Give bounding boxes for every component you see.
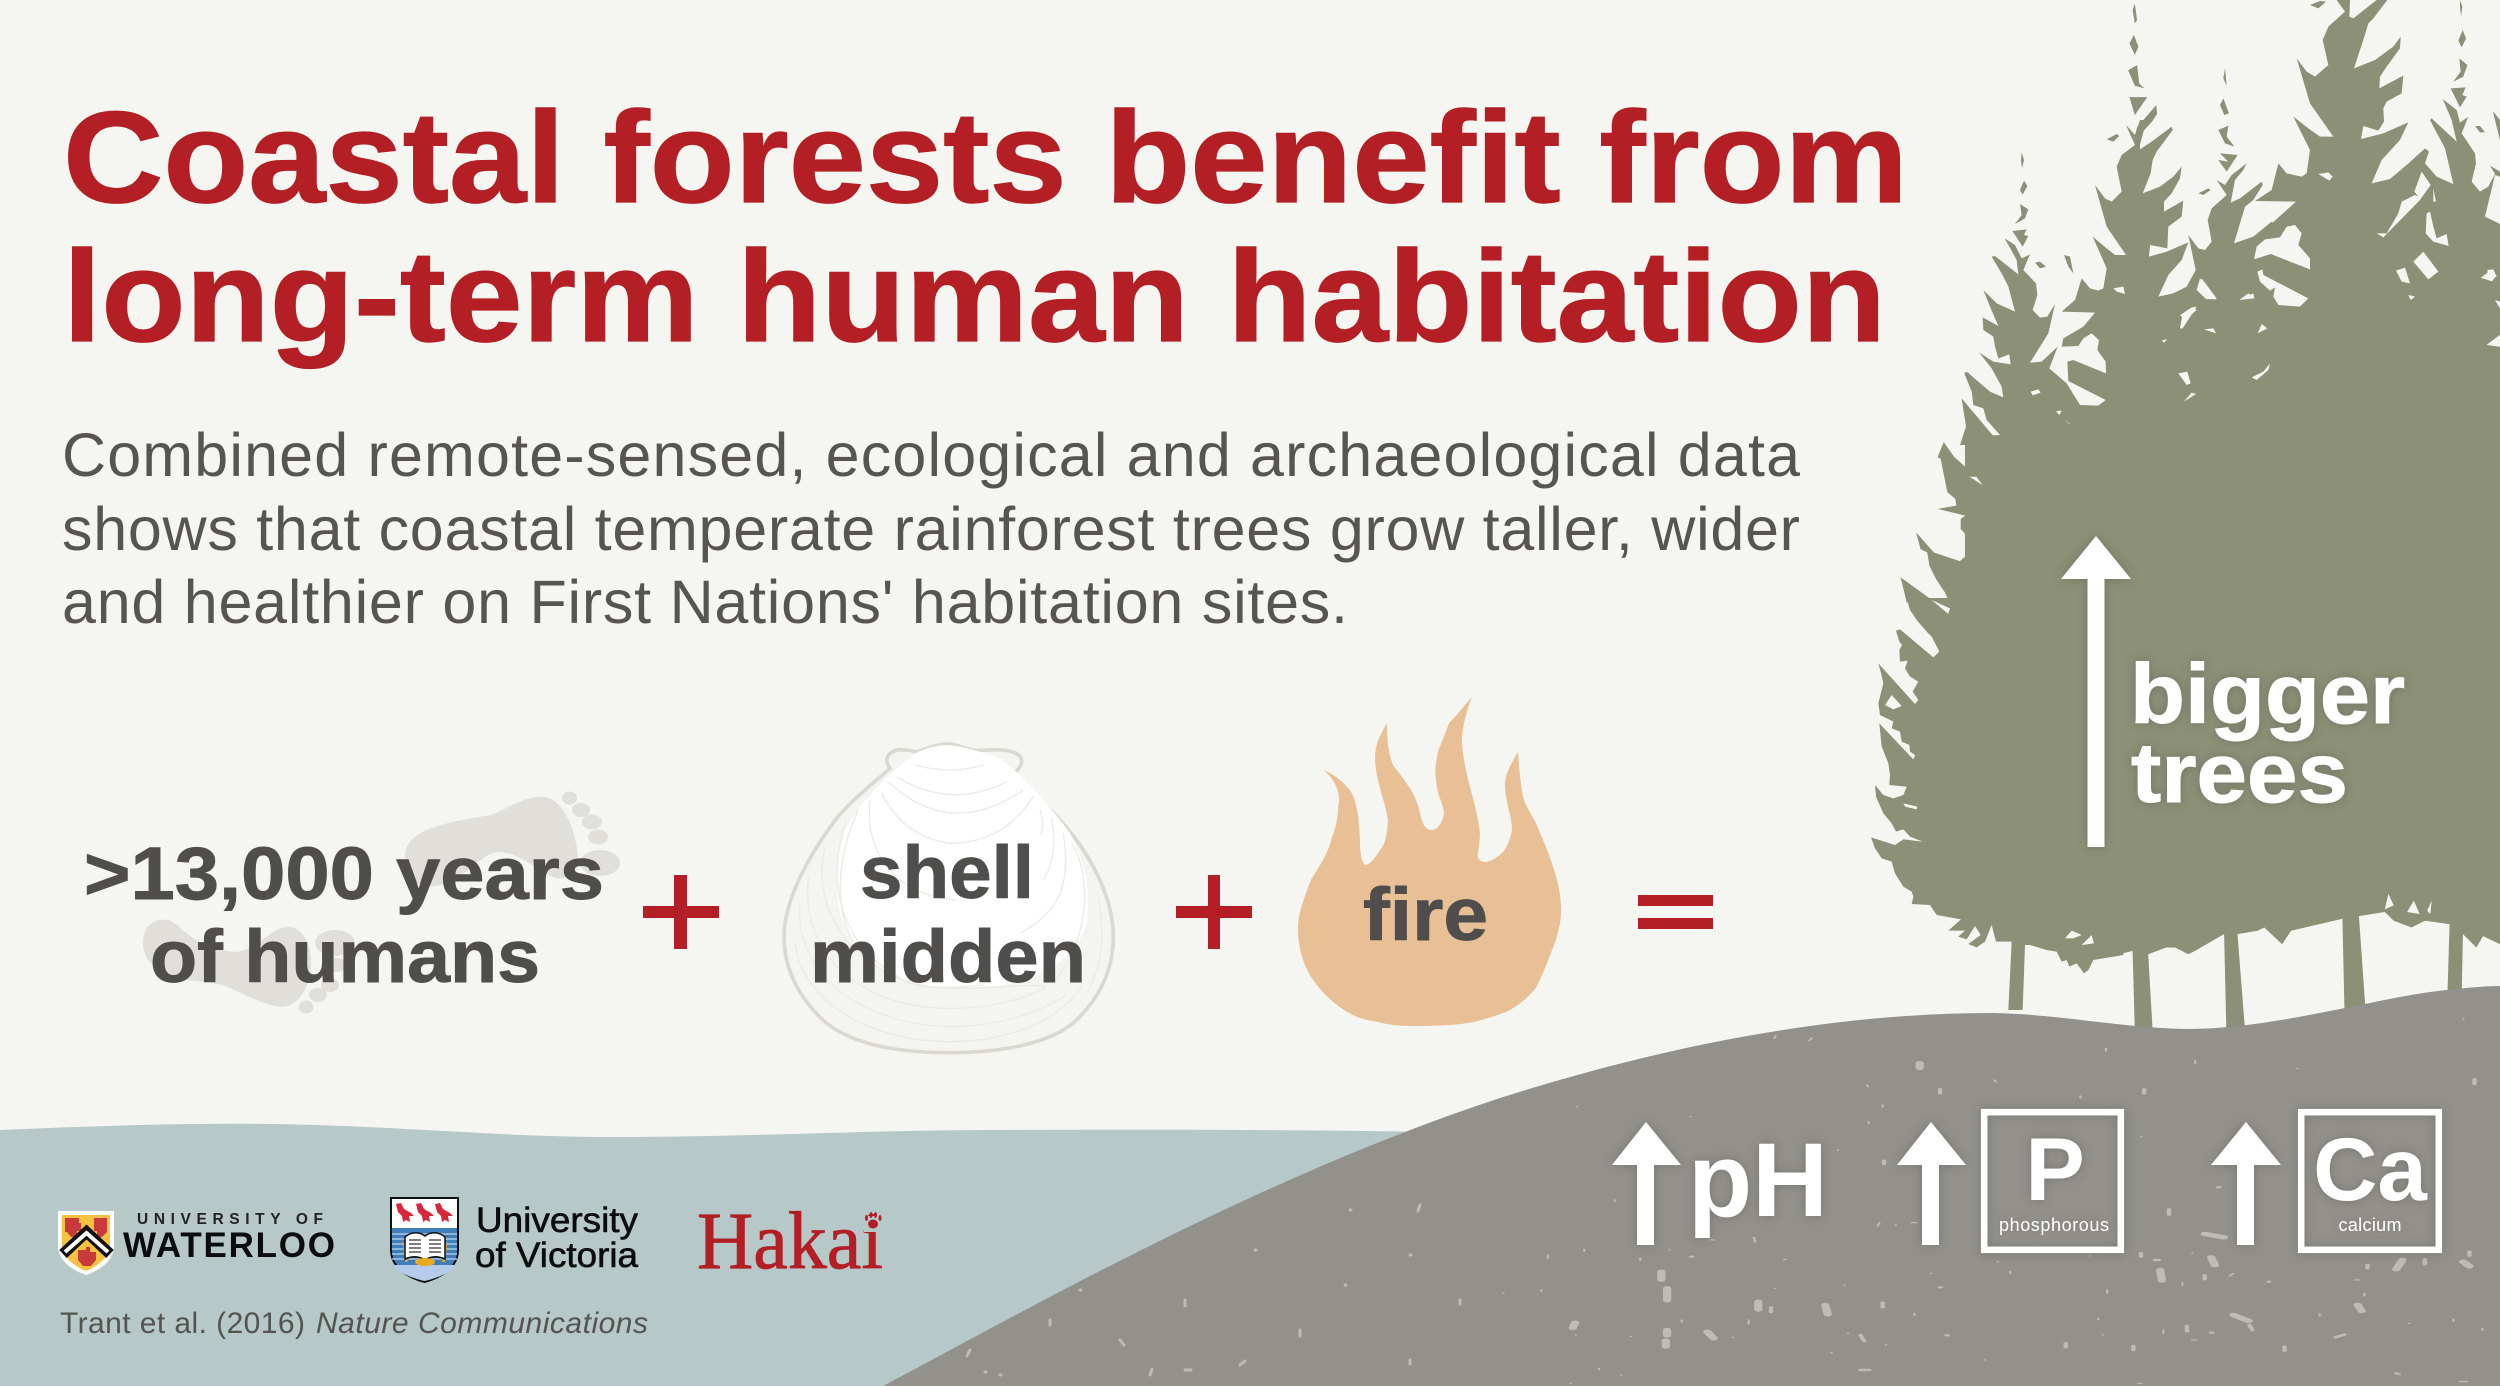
element box: phosphorous: P [2025, 1119, 2085, 1219]
element box: calcium: calcium [2338, 1215, 2402, 1235]
logo: University of Waterloo: UNIVERSITY OF [137, 1211, 323, 1228]
citation: Trant et al. (2016) [60, 1307, 305, 1340]
label: bigger trees: bigger [2130, 647, 2405, 741]
paw mark [864, 1212, 882, 1232]
element box: calcium [2301, 1112, 2439, 1250]
element box: calcium: Ca [2313, 1119, 2428, 1219]
water band [0, 1124, 1450, 1386]
plus sign [1176, 875, 1252, 949]
citation: Nature Communications [316, 1307, 648, 1340]
intro paragraph [62, 421, 1800, 636]
label: shell midden: shell [860, 831, 1034, 914]
element box: phosphorous [1984, 1112, 2121, 1250]
logo: University of Victoria: University [476, 1201, 639, 1240]
arrow: phosphorous up [1897, 1122, 1966, 1245]
waterloo shield [58, 1211, 114, 1275]
label: bigger trees: trees [2131, 726, 2348, 820]
ground speckles [967, 1019, 2482, 1383]
arrow: pH up [1612, 1122, 1681, 1245]
victoria shield [391, 1198, 458, 1282]
arrow: calcium up [2211, 1122, 2281, 1245]
tree canopy gaps [1885, 172, 2500, 945]
intro paragraph: and healthier on First Nations' habitation sites. [62, 568, 1348, 636]
label: years of humans: >13,000 years [84, 832, 604, 915]
intro paragraph: shows that coastal temperate rainforest trees grow taller, wider [62, 495, 1800, 563]
plus sign [643, 875, 719, 949]
icon: clam shell [784, 744, 1113, 1053]
icon: footprints [143, 792, 620, 1014]
equals sign [1638, 895, 1713, 929]
label: shell midden: midden [810, 915, 1086, 998]
title [63, 84, 1908, 369]
logo: University of Victoria [391, 1198, 639, 1282]
intro paragraph: Combined remote-sensed, ecological and archaeological data [62, 421, 1800, 489]
label: bigger trees [2130, 647, 2405, 820]
logo: University of Victoria: of Victoria [475, 1236, 639, 1275]
logo: University of Waterloo: WATERLOO [123, 1226, 335, 1265]
logo: University of Waterloo [58, 1211, 335, 1275]
label: years of humans [84, 832, 604, 998]
citation [60, 1307, 648, 1340]
arrow: bigger trees [2061, 536, 2131, 847]
label: pH: pH [1688, 1122, 1828, 1239]
title: long-term human habitation [63, 223, 1886, 369]
trees silhouette [1871, 0, 2500, 1031]
label: fire: fire [1363, 873, 1488, 956]
element box: phosphorous: phosphorous [1999, 1215, 2109, 1235]
label: shell midden [810, 831, 1086, 998]
logo: Hakai: Hakai [697, 1195, 883, 1286]
label: years of humans: of humans [150, 915, 540, 998]
title: Coastal forests benefit from [63, 84, 1908, 230]
icon: fire [1298, 697, 1561, 1026]
ground hill [883, 986, 2500, 1386]
